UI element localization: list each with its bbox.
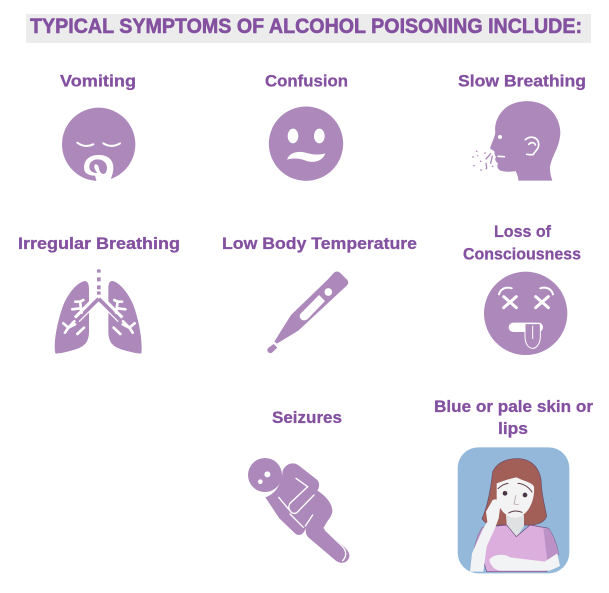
heading: loss of consciousness: Loss of [494, 222, 551, 241]
hair [482, 459, 547, 526]
icon: curled figure [248, 458, 349, 563]
raised hand and arm [470, 499, 501, 572]
lower arm [489, 553, 560, 571]
heading: loss of consciousness [463, 222, 581, 264]
heading: loss of consciousness: Consciousness [463, 244, 581, 264]
heading: seizures: Seizures [272, 408, 342, 427]
face [497, 477, 534, 518]
icon: thermometer [267, 271, 348, 353]
panel: slow breathing [458, 72, 586, 181]
heading: blue or pale skin or lips: Blue or pale skin or [434, 397, 593, 416]
sleeves [474, 527, 559, 561]
icon: head breathing [472, 101, 560, 181]
heading: irregular breathing: Irregular Breathing [18, 234, 180, 253]
icon: vomiting face [62, 108, 135, 182]
icon: unconscious face [484, 272, 567, 355]
panel: loss of consciousness [463, 222, 581, 355]
panel: seizures [248, 408, 349, 563]
panel: low body temperature [222, 234, 417, 353]
panel: irregular breathing [18, 234, 180, 353]
heading: low body temperature: Low Body Temperature [222, 234, 417, 253]
illustration: pale worried woman [458, 447, 569, 573]
shirt [474, 525, 559, 572]
heading: blue or pale skin or lips: lips [498, 419, 528, 438]
icon: confused face [269, 106, 343, 181]
title banner: TYPICAL SYMPTOMS OF ALCOHOL POISONING INCLUDE: [30, 15, 582, 38]
panel: blue or pale skin [434, 397, 593, 573]
neck [506, 515, 524, 537]
heading: vomiting: Vomiting [60, 72, 136, 90]
icon: lungs [55, 269, 142, 353]
panel: vomiting [60, 72, 136, 182]
panel: confusion [265, 72, 348, 181]
heading: blue or pale skin or lips [434, 397, 593, 438]
heading: confusion: Confusion [265, 72, 348, 90]
heading: slow breathing: Slow Breathing [458, 72, 586, 90]
